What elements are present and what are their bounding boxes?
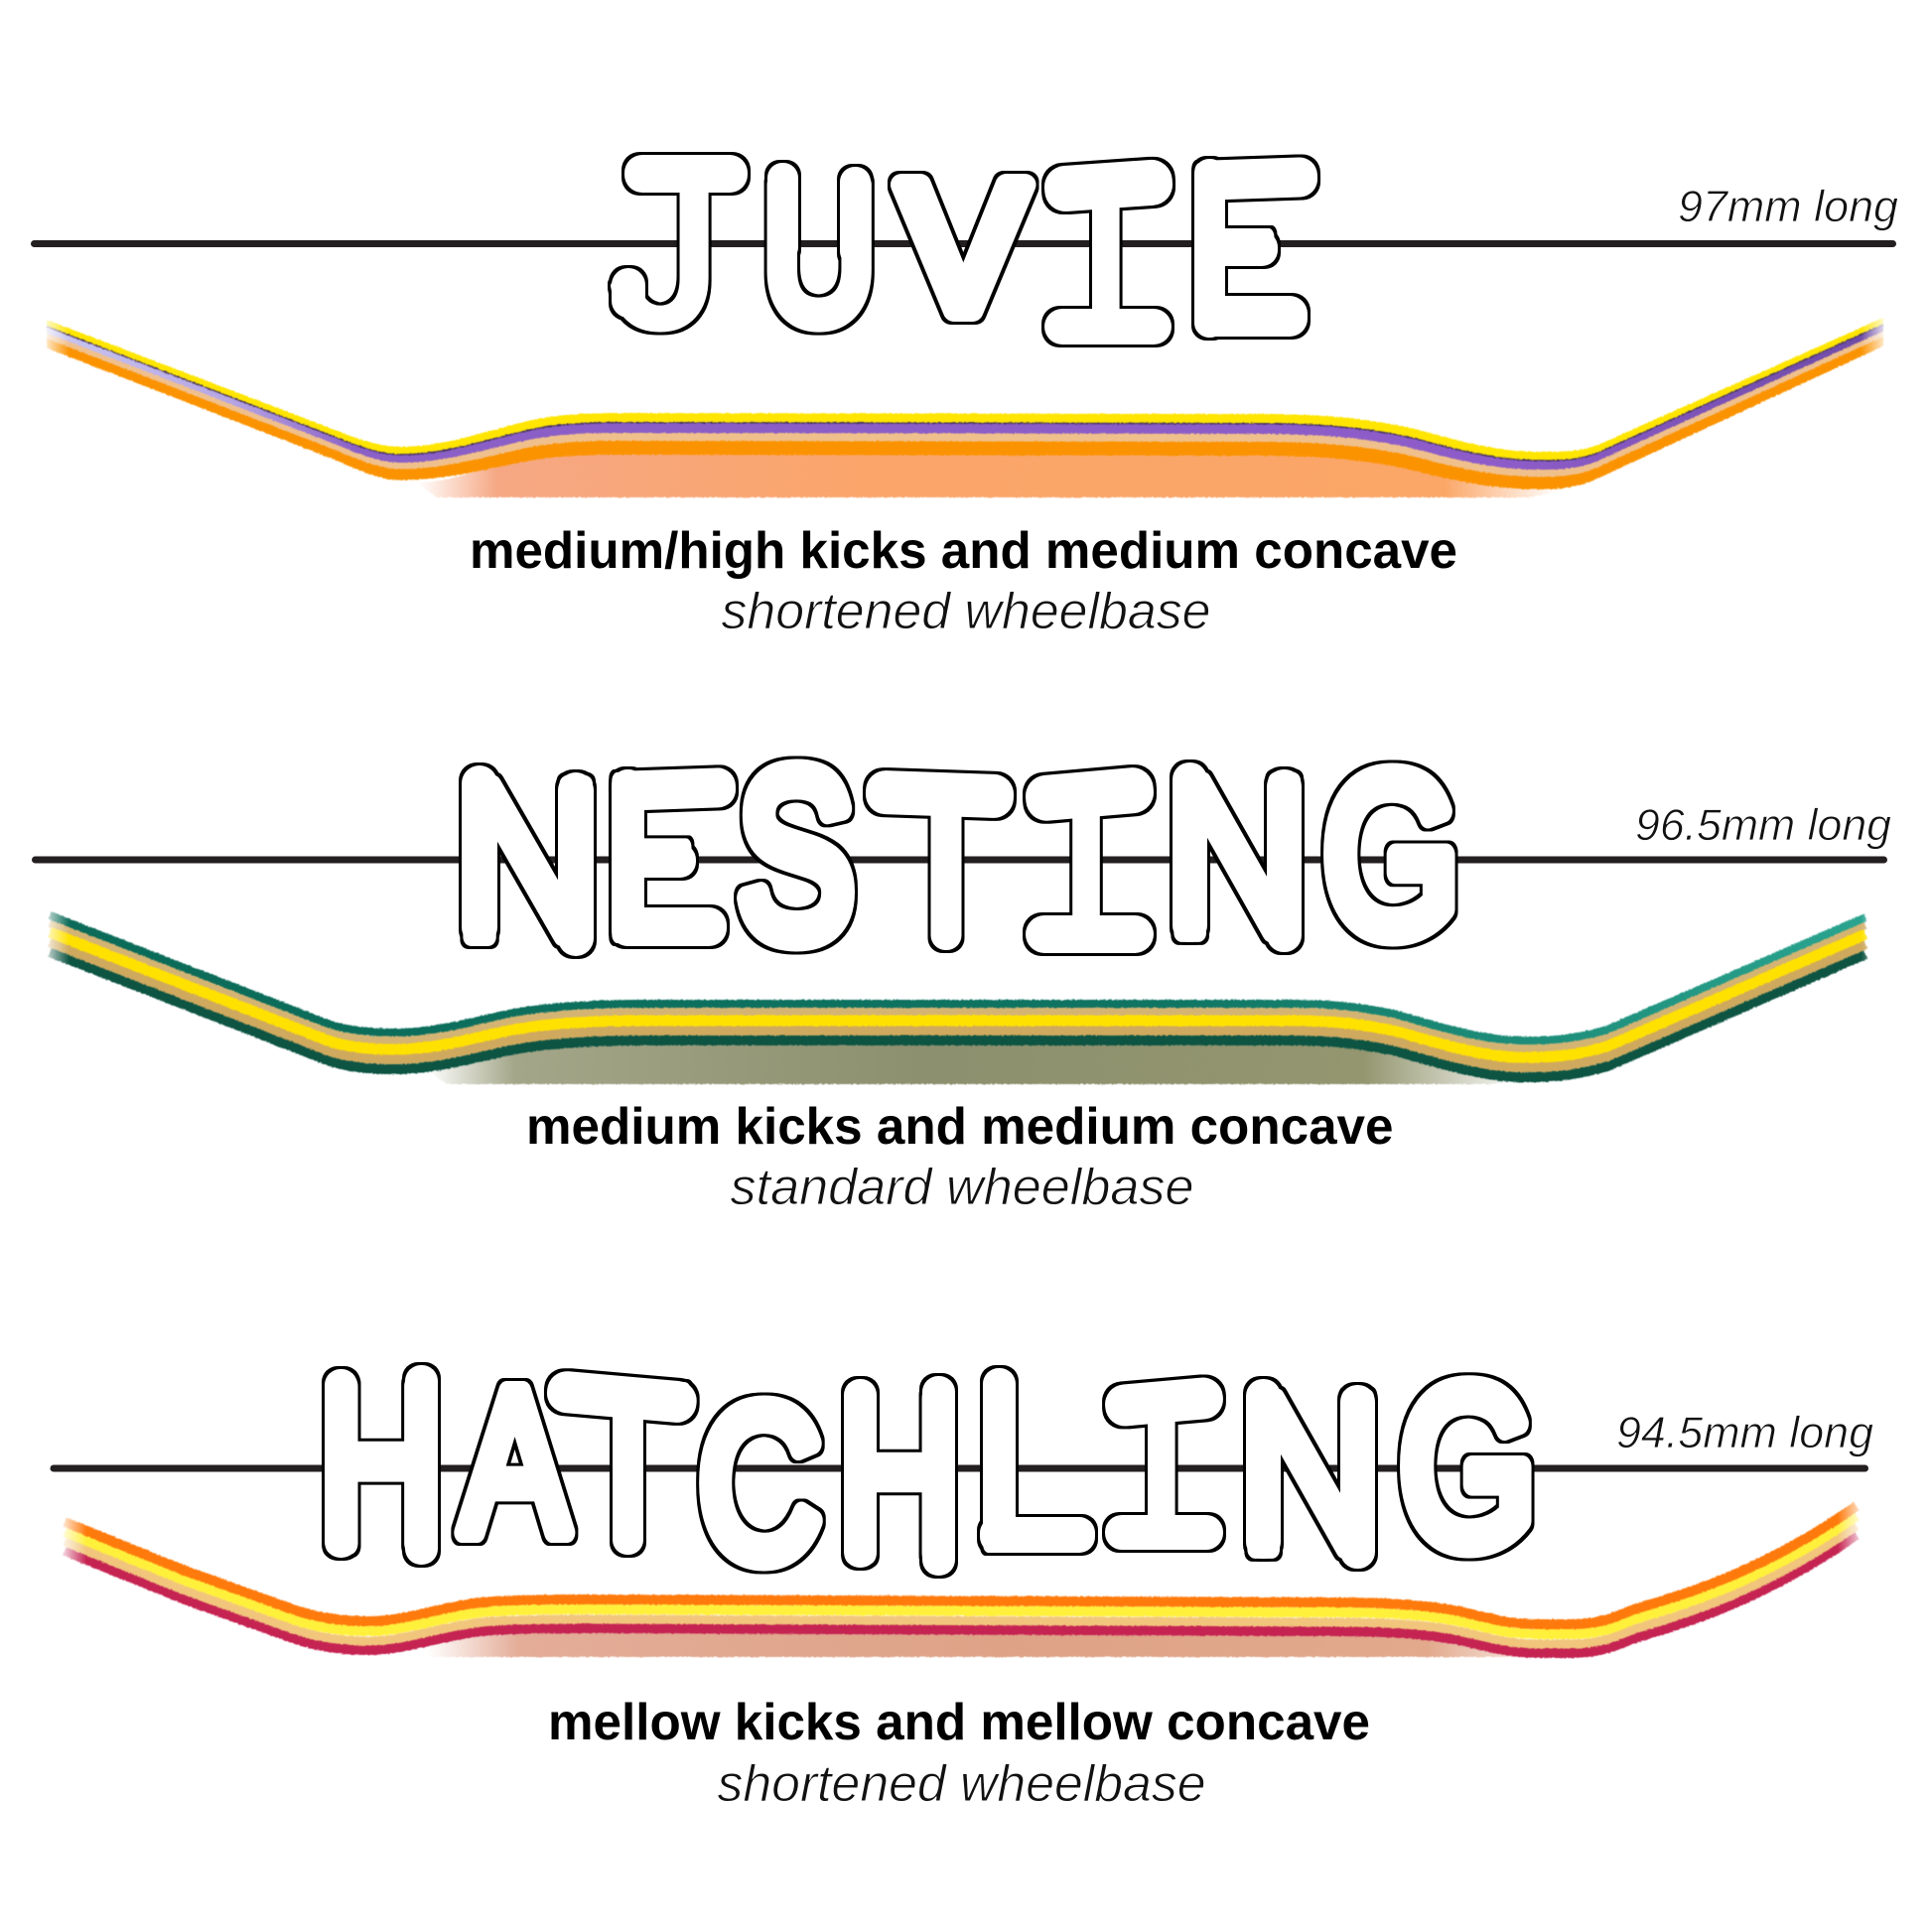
guide line: JUVIE: [34, 240, 1892, 247]
title: HATCHLING: I: [1137, 1347, 1186, 1585]
title: HATCHLING: C: [699, 1362, 821, 1604]
deck profile: JUVIE: [46, 318, 1884, 498]
title: NESTING: E: [606, 733, 699, 982]
title: HATCHLING: [320, 1330, 1536, 1604]
title: HATCHLING: A: [462, 1348, 568, 1577]
description: HATCHLING kicks and concave: mellow kicks and mellow concave: [548, 1693, 1370, 1750]
title: HATCHLING: H: [839, 1350, 959, 1602]
panel: JUVIE: [34, 117, 1898, 640]
length label: 94.5mm long: 94.5mm long: [1616, 1409, 1873, 1457]
panel: HATCHLING: [54, 1330, 1873, 1813]
title: JUVIE: [612, 117, 1318, 382]
title: NESTING: T: [886, 740, 1007, 973]
title: HATCHLING: N: [1239, 1349, 1382, 1596]
title: JUVIE: V: [900, 145, 1026, 349]
title: NESTING: N: [1166, 733, 1309, 980]
length label: 96.5mm long: 96.5mm long: [1635, 801, 1891, 850]
description: NESTING kicks and concave: medium kicks and medium concave: [526, 1097, 1394, 1155]
description: NESTING wheelbase: standard wheelbase: [731, 1159, 1193, 1216]
panel: NESTING: [36, 721, 1891, 1216]
length label: 97mm long: 97mm long: [1678, 183, 1898, 231]
title: HATCHLING: T: [568, 1343, 689, 1577]
guide line: HATCHLING: [54, 1465, 1864, 1471]
title: NESTING: N: [455, 737, 602, 985]
deck profile: NESTING: [50, 915, 1865, 1084]
title: NESTING: I: [1061, 734, 1111, 991]
title: JUVIE: J: [612, 117, 721, 374]
title: JUVIE: I: [1081, 125, 1131, 382]
description: HATCHLING wheelbase: shortened wheelbase: [717, 1755, 1205, 1813]
guide line: NESTING: [36, 856, 1884, 864]
title: HATCHLING: H: [320, 1336, 443, 1591]
title: NESTING: S: [738, 721, 854, 988]
description: JUVIE kicks and concave: medium/high kicks and medium concave: [470, 521, 1457, 579]
title: JUVIE: E: [1188, 125, 1282, 371]
title: NESTING: [455, 721, 1459, 991]
title: JUVIE: U: [762, 143, 876, 363]
title: NESTING: G: [1323, 728, 1459, 982]
description: JUVIE wheelbase: shortened wheelbase: [721, 583, 1211, 640]
title: HATCHLING: G: [1400, 1341, 1536, 1593]
deck profile: HATCHLING: [65, 1506, 1857, 1657]
title: HATCHLING: L: [974, 1330, 1073, 1596]
